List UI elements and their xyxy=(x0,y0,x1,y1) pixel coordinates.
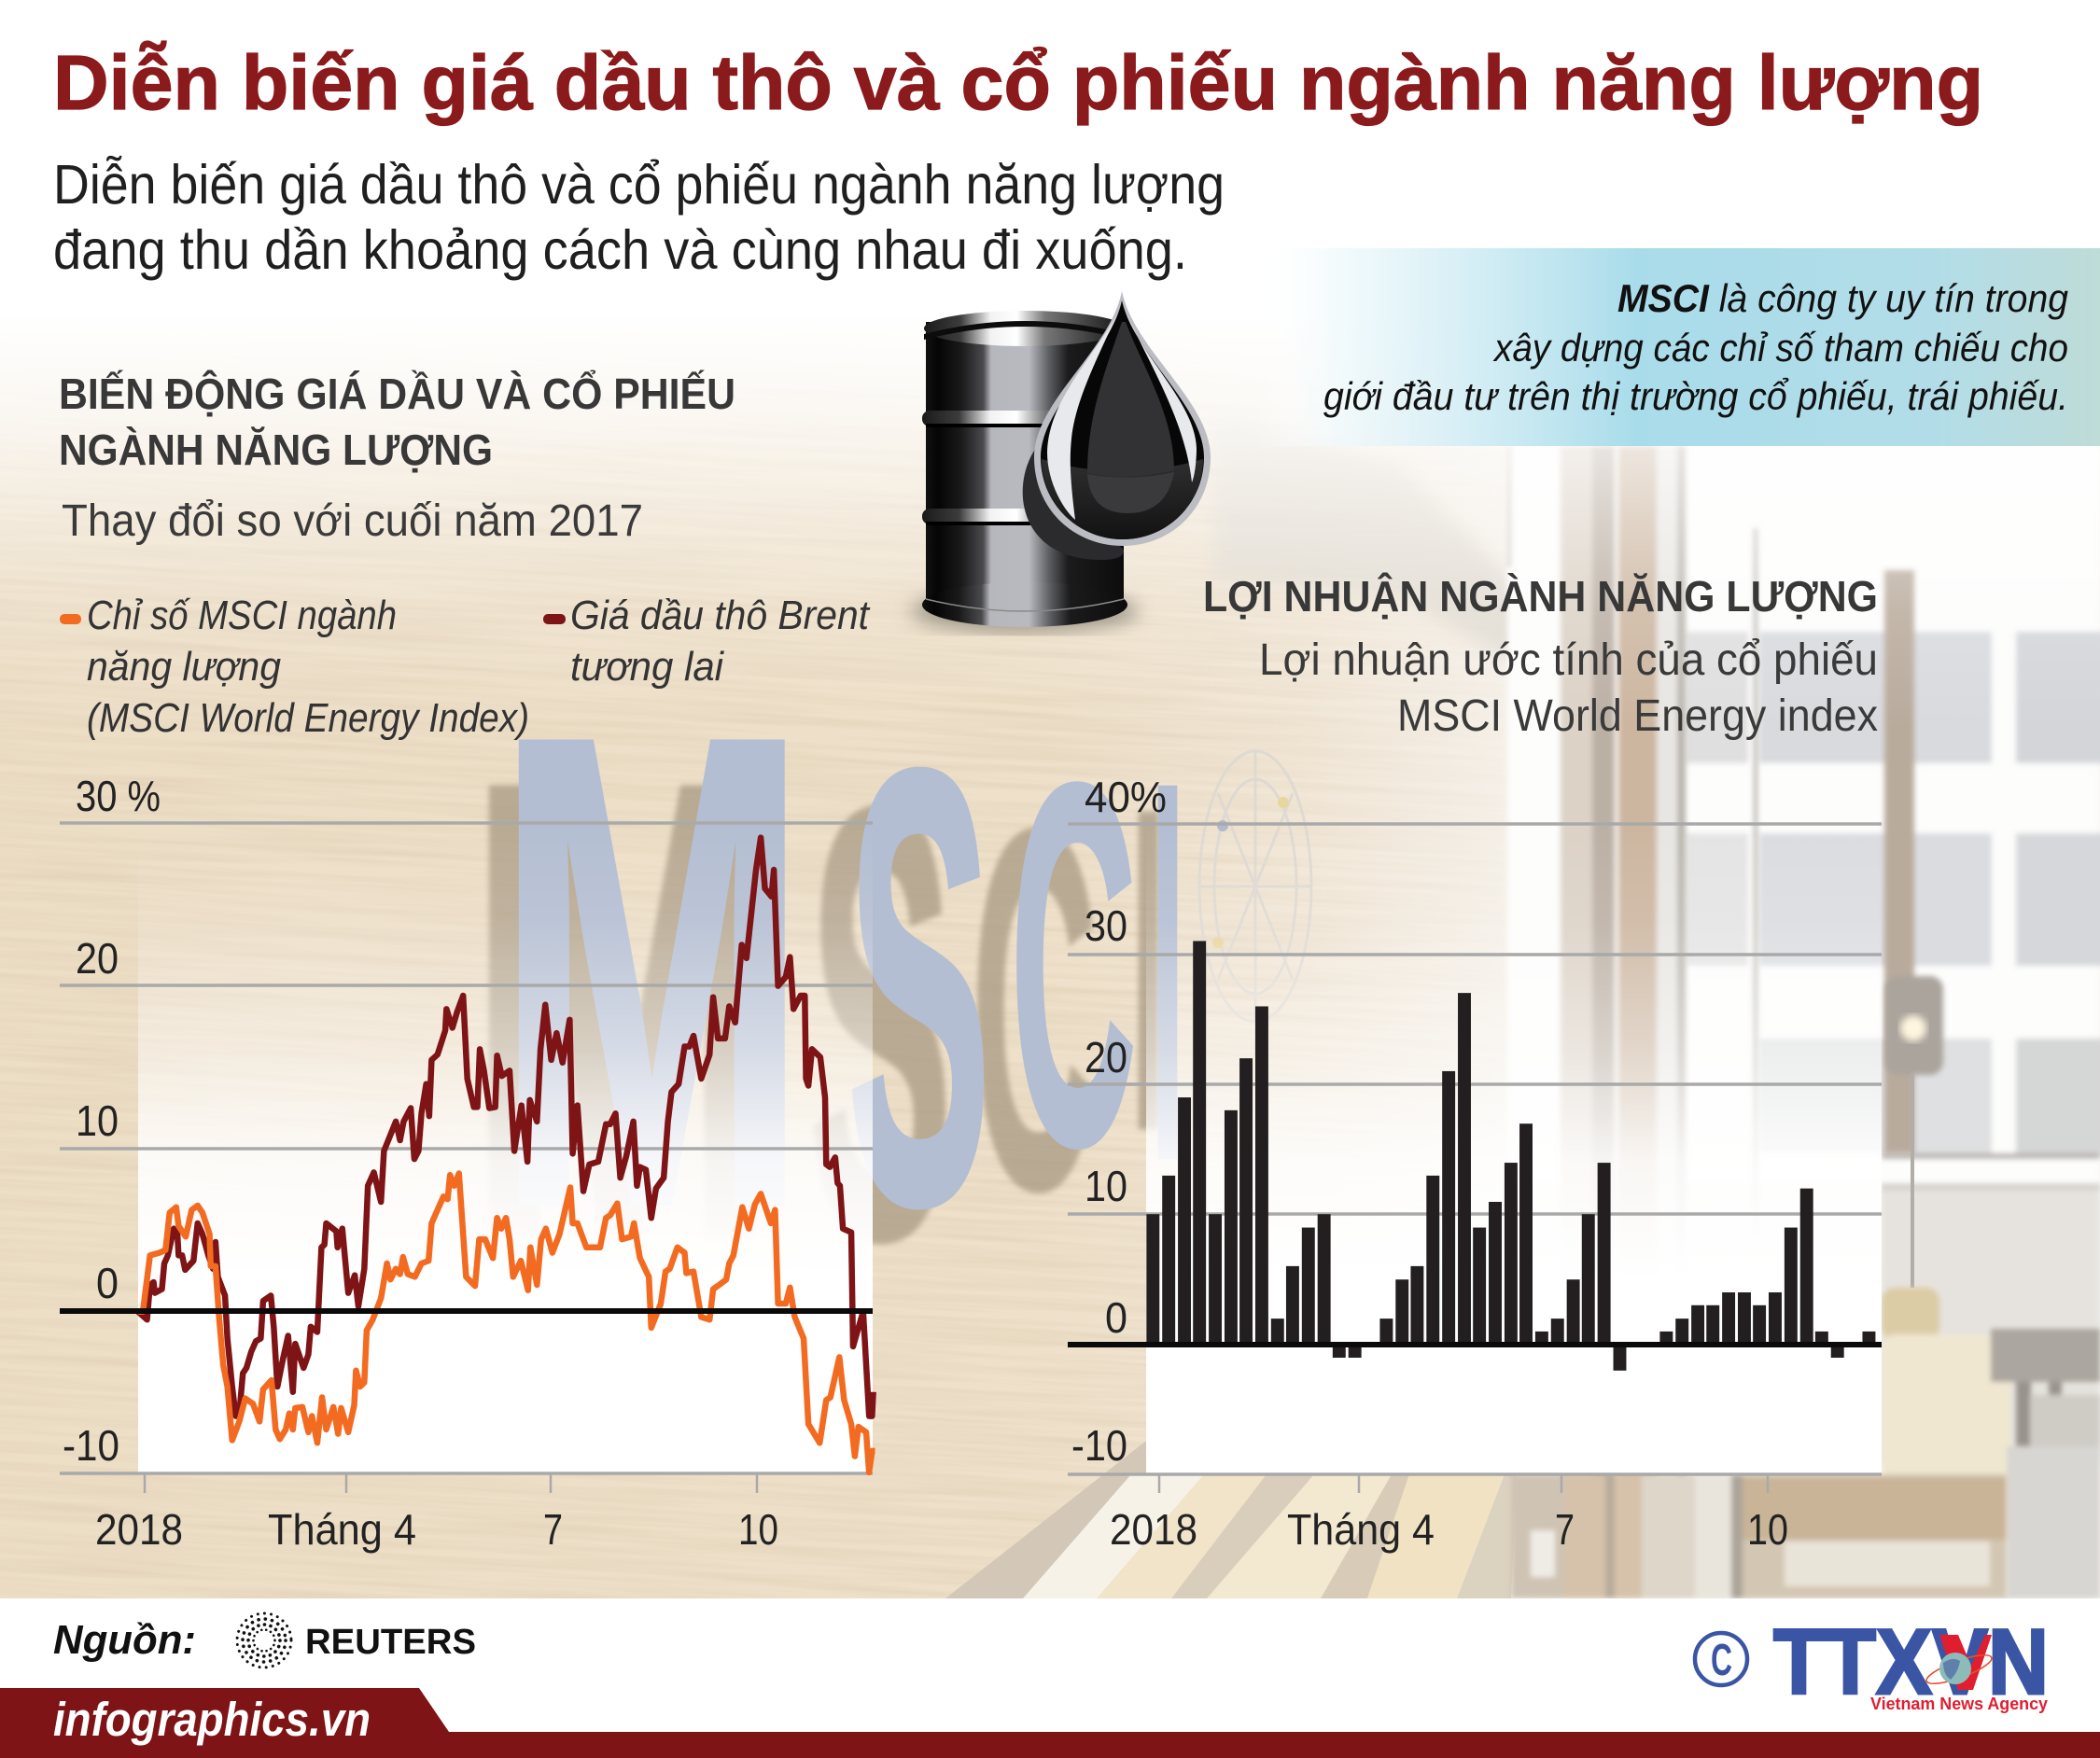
heading: left chart: BIẾN ĐỘNG GIÁ DẦU VÀ CỔ PHIẾU xyxy=(59,370,735,418)
title: Diễn biến giá dầu thô và cổ phiếu ngành năng lượng xyxy=(53,39,1983,126)
photo: ferris wheel model xyxy=(1199,751,1311,1022)
right chart subtitle: MSCI World Energy index xyxy=(1397,691,1878,741)
y axis labels: 30 % xyxy=(76,772,161,820)
y axis labels: -10 xyxy=(1071,1421,1127,1470)
callout text: about MSCI: MSCI là công ty uy tín trong xyxy=(1617,276,2068,320)
gridlines xyxy=(1068,824,1882,1493)
y axis labels: 10 xyxy=(1085,1162,1127,1210)
photo: MSCI wall letters: M xyxy=(465,647,779,1375)
photo: MSCI wall letters: C xyxy=(971,724,1098,1297)
y axis labels: 10 xyxy=(76,1096,119,1145)
logo: TTXVN: TTXVN xyxy=(1773,1610,2049,1713)
legend: Brent crude: tương lai xyxy=(570,644,724,690)
photo: yellow sofa, table, rug xyxy=(1882,1288,2100,1598)
y axis labels: -10 xyxy=(63,1421,119,1470)
zero line xyxy=(1068,1342,1882,1347)
legend: MSCI index xyxy=(60,593,529,741)
icon: copyright: C xyxy=(1711,1636,1732,1685)
y axis labels xyxy=(1071,773,1167,1470)
series: MSCI World Energy Index xyxy=(138,1174,875,1472)
photo: MSCI wall letters: S xyxy=(808,679,953,1367)
drop shadow blob xyxy=(1023,448,1124,560)
right chart subtitle xyxy=(1259,635,1878,741)
x axis labels: 2018 xyxy=(1110,1505,1197,1554)
photo: MSCI wall letters: S xyxy=(847,640,991,1333)
bars xyxy=(1146,941,1875,1371)
y axis labels: 20 xyxy=(1085,1033,1127,1081)
subtitle xyxy=(53,154,1225,281)
x axis labels xyxy=(95,1505,778,1554)
background: wood wall and blurred office photo xyxy=(0,370,2100,1598)
callout text: about MSCI: giới đầu tư trên thị trường cổ phiếu, trái phiếu. xyxy=(1323,374,2068,418)
x axis labels xyxy=(1110,1505,1788,1554)
legend: MSCI index: Chỉ số MSCI ngành xyxy=(87,593,397,638)
source label: Nguồn: xyxy=(53,1617,196,1663)
y axis labels: 20 xyxy=(76,934,119,983)
photo: MSCI wall letters xyxy=(465,596,1177,1375)
x axis labels: 2018 xyxy=(95,1505,183,1554)
subtitle: Diễn biến giá dầu thô và cổ phiếu ngành năng lượng xyxy=(53,154,1225,216)
icon: copyright xyxy=(1695,1633,1747,1685)
x axis labels: Tháng 4 xyxy=(1287,1505,1435,1554)
heading: left chart xyxy=(59,370,735,474)
Reuters wordmark: REUTERS xyxy=(305,1623,476,1662)
subtitle: đang thu dần khoảng cách và cùng nhau đi xuống. xyxy=(53,219,1187,281)
photo: floor stripes xyxy=(945,1441,2007,1598)
photo: MSCI wall letters: C xyxy=(1010,677,1137,1253)
barrel body xyxy=(922,311,1127,627)
footer panel xyxy=(0,1598,2100,1758)
heading: right chart: LỢI NHUẬN NGÀNH NĂNG LƯỢNG xyxy=(1203,572,1878,621)
legend: Brent crude: Giá dầu thô Brent xyxy=(570,593,871,638)
line chart: oil vs energy index xyxy=(60,772,875,1554)
callout background xyxy=(1255,248,2100,446)
left chart subtitle: Thay đổi so với cuối năm 2017 xyxy=(62,496,643,546)
x axis labels: Tháng 4 xyxy=(268,1505,416,1554)
footer band: infographics.vn xyxy=(53,1693,371,1746)
x axis labels: 10 xyxy=(1747,1505,1788,1554)
callout text: about MSCI xyxy=(1323,276,2068,418)
y axis labels xyxy=(63,772,161,1470)
heading: left chart: NGÀNH NĂNG LƯỢNG xyxy=(59,426,493,474)
right chart subtitle: Lợi nhuận ước tính của cổ phiếu xyxy=(1259,635,1878,685)
photo: window wall xyxy=(1507,446,2100,1463)
y axis labels: 0 xyxy=(96,1259,119,1307)
icon: Reuters dot globe xyxy=(237,1613,291,1667)
callout text: about MSCI: xây dựng các chỉ số tham chiếu cho xyxy=(1492,326,2068,370)
zero line xyxy=(60,1308,873,1314)
series: Brent crude xyxy=(138,838,874,1416)
y axis labels: 30 xyxy=(1085,901,1127,950)
photo: columns xyxy=(1507,446,1914,1491)
y axis labels: 0 xyxy=(1105,1293,1127,1342)
legend: MSCI index: (MSCI World Energy Index) xyxy=(87,695,529,741)
bar chart: energy sector earnings xyxy=(1068,773,1882,1554)
oil drop xyxy=(1034,291,1211,546)
footer band xyxy=(0,1688,2100,1758)
legend: MSCI index: năng lượng xyxy=(87,644,281,690)
logo: TTXVN: Vietnam News Agency xyxy=(1870,1695,2048,1713)
icon: oil barrel and drop xyxy=(911,291,1211,632)
photo: pendant lamp xyxy=(1885,976,1943,1288)
photo: MSCI wall letters: M xyxy=(495,596,809,1346)
x axis labels: 10 xyxy=(738,1505,778,1554)
gridlines xyxy=(60,823,873,1493)
x axis labels: 7 xyxy=(1555,1505,1575,1554)
x axis labels: 7 xyxy=(543,1505,563,1554)
y axis labels: 40% xyxy=(1085,773,1167,821)
photo: diagonal wall shading xyxy=(1213,411,1531,672)
legend: Brent crude xyxy=(543,593,871,690)
